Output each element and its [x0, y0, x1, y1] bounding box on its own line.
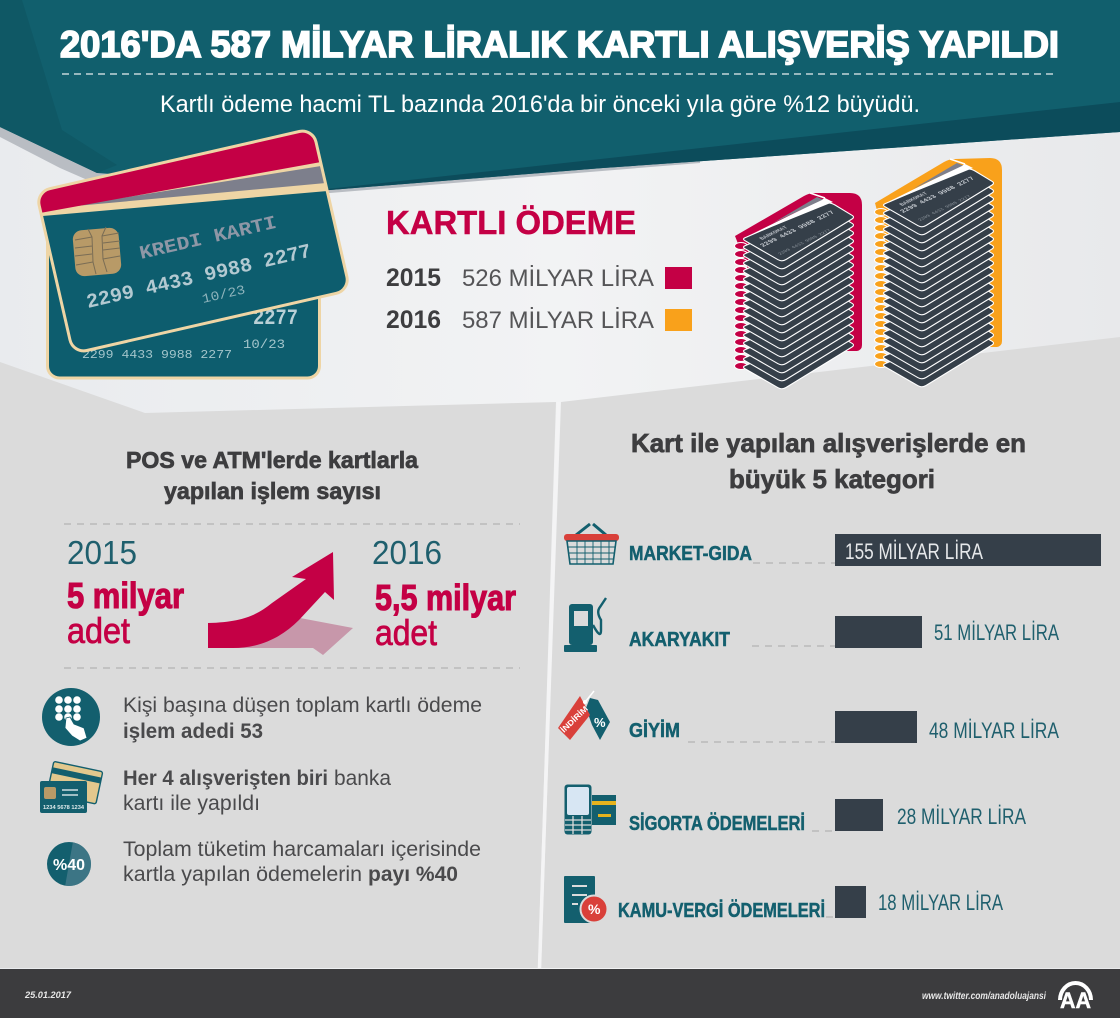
heading: 5 kategori: [631, 428, 1026, 494]
2015 figure: adet: [67, 610, 130, 651]
row: kamu-vergi ödemeleri: 18 MİLYAR LİRA: [878, 890, 1003, 915]
row: akaryakıt: AKARYAKIT: [629, 629, 730, 651]
row: sigorta ödemeleri: [564, 784, 1026, 835]
icon: fuel pump: [564, 598, 606, 652]
illustration: credit cards: [37, 130, 349, 380]
front credit card: 10/23: [201, 282, 247, 307]
date: 25.01.2017: [24, 990, 72, 1001]
text: işlem adedi: Kişi başına düşen toplam kartlı ödeme: [123, 694, 482, 717]
grey panels background: [0, 337, 1120, 968]
legend row 2015: 2015: [386, 264, 441, 292]
text: her 4 alışveriş: [123, 767, 391, 815]
row: akaryakıt: [564, 598, 1059, 652]
icon: tax document: [564, 876, 608, 923]
legend row 2015: [386, 264, 692, 292]
front credit card: KREDI KARTI: [137, 212, 279, 265]
text: toplam tüketim: payı %40: [368, 863, 458, 886]
2015 figure: 2015: [67, 534, 137, 571]
heading: 5 kategori: Kart ile yapılan alışverişlerde en: [631, 428, 1026, 458]
legend row 2016: 2016: [386, 306, 441, 334]
legend row 2016: [386, 306, 692, 334]
row: market-gıda: MARKET-GIDA: [629, 543, 752, 565]
twitter url: www.twitter.com/anadoluajansi: [922, 990, 1047, 1002]
icon: keypad hand: [42, 688, 100, 746]
text: her 4 alışveriş: banka: [334, 767, 391, 790]
heading: kartlı ödeme: KARTLI ÖDEME: [386, 204, 636, 241]
title: 2016'DA 587 MİLYAR LİRALIK KARTLI ALIŞVERİŞ YAPILDI: [60, 24, 1059, 65]
arrow: growth: [208, 552, 353, 655]
back credit card: 2299 4433 9988 2277: [82, 348, 232, 362]
text: işlem adedi: işlem adedi 53: [123, 720, 263, 743]
icon: tax document: %: [588, 901, 601, 917]
back credit card: 10/23: [243, 337, 285, 352]
legend row 2016: 587 MİLYAR LİRA: [462, 307, 654, 334]
icon: %40: [47, 842, 94, 889]
2016 figure: 5,5 milyar: [375, 577, 516, 618]
header band: [0, 0, 1120, 193]
chip: [72, 227, 122, 277]
icon: %40: %40: [53, 857, 85, 874]
panel: POS ve ATM: [40, 447, 520, 889]
card stack 2016: 2299 4433 9988 2277: [899, 176, 978, 215]
legend row 2015: 526 MİLYAR LİRA: [462, 265, 654, 292]
heading: 5 kategori: büyük 5 kategori: [729, 464, 935, 494]
subtitle: Kartlı ödeme hacmi TL bazında 2016'da bir önceki yıla göre %12 büyüdü.: [160, 91, 920, 118]
card stack 2016: BANKOMAT: [898, 191, 930, 207]
icon: bank cards: 1234 5678 1234: [43, 805, 85, 811]
card stack 2016: 2299 4433 9988 2277: [917, 194, 973, 222]
footer bar: [0, 969, 1120, 1018]
text: işlem adedi: [123, 694, 482, 743]
heading: POS ve ATM: [126, 447, 418, 504]
row: akaryakıt: 51 MİLYAR LİRA: [934, 620, 1059, 645]
card stack 2015: 2299 4433 9988 2277: [759, 210, 838, 249]
front credit card: 2299 4433 9988 2277: [84, 241, 314, 315]
card stack 2015: [734, 193, 862, 389]
panel: en büyük 5 kategori: [558, 428, 1101, 923]
icon: basket: [564, 524, 619, 564]
heading: POS ve ATM: yapılan işlem sayısı: [164, 478, 381, 504]
card stack 2015: 2299 4433 9988 2277: [777, 228, 833, 256]
back credit card: 2277: [253, 306, 298, 331]
card stack 2015: BANKOMAT: [758, 225, 790, 241]
row: giyim: [558, 691, 1059, 743]
front credit card: [37, 130, 349, 352]
divider between panels: [540, 402, 558, 968]
2016 figure: [372, 534, 516, 653]
row: sigorta ödemeleri: 28 MİLYAR LİRA: [897, 804, 1026, 829]
row: giyim: 48 MİLYAR LİRA: [929, 718, 1059, 743]
text: toplam tüketim: kartla yapılan ödemelerin: [123, 863, 362, 886]
row: sigorta ödemeleri: SİGORTA ÖDEMELERİ: [629, 812, 805, 835]
icon: phone and card: [564, 784, 616, 834]
text: toplam tüketim: Toplam tüketim harcamaları içerisinde: [123, 838, 481, 861]
2015 figure: [67, 534, 184, 651]
row: giyim: GİYİM: [629, 719, 680, 742]
heading: POS ve ATM: POS ve ATM'lerde kartlarla: [126, 447, 418, 473]
2015 figure: 5 milyar: [67, 575, 184, 616]
text: toplam tüketim: [123, 838, 481, 886]
icon: price tags: %: [594, 715, 606, 730]
icon: price tags: İNDİRİM: [559, 704, 590, 734]
icon: price tags: [558, 691, 610, 740]
row: kamu-vergi ödemeleri: [564, 876, 1003, 923]
logo: AA: AA: [1060, 988, 1091, 1013]
text: her 4 alışveriş: kartı ile yapıldı: [123, 792, 260, 815]
2016 figure: adet: [375, 612, 437, 653]
row: market-gıda: 155 MİLYAR LİRA: [845, 539, 983, 564]
row: market-gıda: [564, 524, 1101, 566]
card stack 2016: [874, 158, 1002, 387]
text: her 4 alışveriş: Her 4 alışverişten biri: [123, 767, 328, 790]
row: kamu-vergi ödemeleri: KAMU-VERGİ ÖDEMELERİ: [618, 899, 825, 922]
back credit card: [48, 200, 320, 378]
2016 figure: 2016: [372, 534, 442, 571]
icon: bank cards: [40, 761, 103, 813]
